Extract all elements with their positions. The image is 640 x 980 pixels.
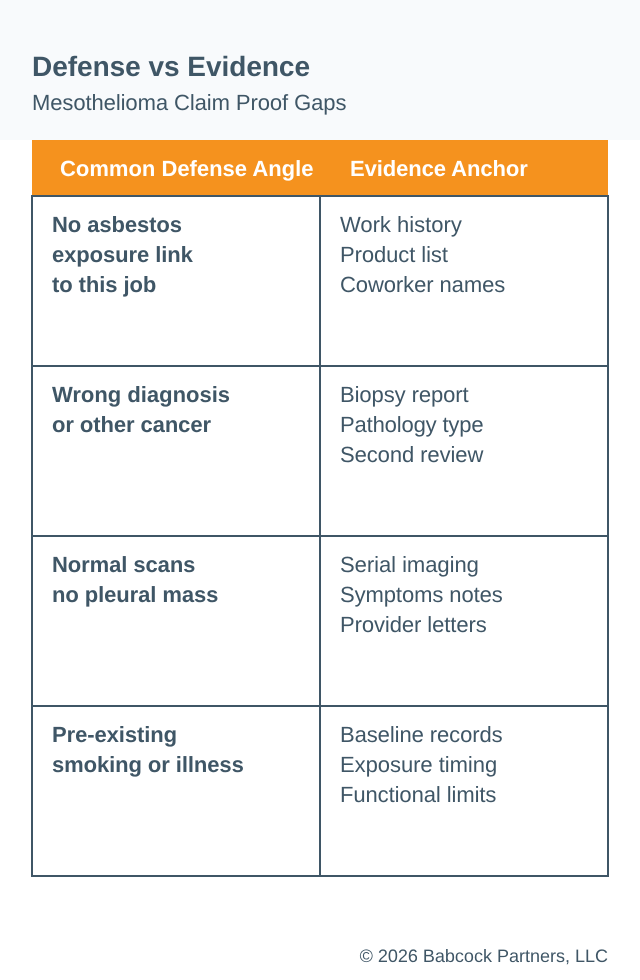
row 2 defense angle: Wrong diagnosis	[52, 382, 230, 407]
row 4 evidence anchor: Functional limits	[340, 782, 496, 807]
row 4 evidence anchor: Exposure timing	[340, 752, 497, 777]
row 4 defense angle: Pre-existing	[52, 722, 177, 747]
row 2 evidence anchor: Second review	[340, 442, 483, 467]
title: Defense vs Evidence	[32, 51, 310, 82]
row 3 evidence anchor: Provider letters	[340, 612, 487, 637]
row 3	[32, 536, 608, 706]
row 1 evidence anchor: Work history	[340, 212, 462, 237]
row 4	[32, 706, 608, 876]
row 4 defense angle: smoking or illness	[52, 752, 244, 777]
row 2	[32, 366, 608, 536]
row 2 evidence anchor: Pathology type	[340, 412, 483, 437]
row 2 defense angle: or other cancer	[52, 412, 211, 437]
row 1	[32, 196, 608, 366]
row 1 defense angle: to this job	[52, 272, 156, 297]
column heading: defense angle: Common Defense Angle	[60, 156, 313, 181]
row 3 evidence anchor: Serial imaging	[340, 552, 479, 577]
row 1 defense angle: No asbestos	[52, 212, 182, 237]
subtitle: Mesothelioma Claim Proof Gaps	[32, 90, 346, 115]
row 1 evidence anchor: Coworker names	[340, 272, 505, 297]
row 2 evidence anchor: Biopsy report	[340, 382, 469, 407]
column heading: evidence anchor: Evidence Anchor	[350, 156, 528, 181]
table header row	[32, 140, 608, 196]
row 4 evidence anchor: Baseline records	[340, 722, 503, 747]
footer copyright: © 2026 Babcock Partners, LLC	[360, 946, 608, 966]
row 3 defense angle: no pleural mass	[52, 582, 218, 607]
row 3 defense angle: Normal scans	[52, 552, 195, 577]
row 3 evidence anchor: Symptoms notes	[340, 582, 503, 607]
row 1 evidence anchor: Product list	[340, 242, 448, 267]
header band	[0, 0, 640, 140]
row 1 defense angle: exposure link	[52, 242, 194, 267]
